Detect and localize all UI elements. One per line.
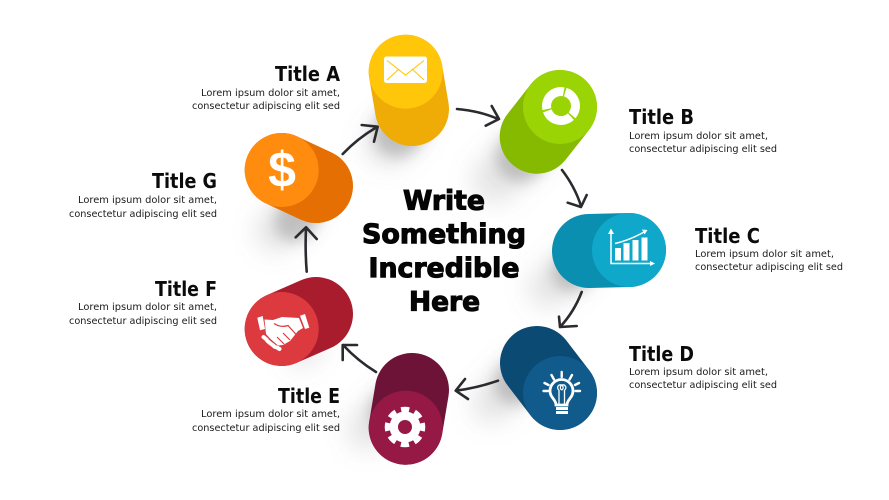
text block E bbox=[192, 384, 340, 434]
text block B: Title B bbox=[629, 105, 694, 129]
center heading: Something bbox=[362, 219, 526, 250]
cylinder F bbox=[245, 292, 319, 366]
center heading: Write bbox=[403, 186, 485, 216]
icon: gear bbox=[385, 407, 425, 447]
text block D bbox=[629, 342, 777, 391]
text block C: Lorem ipsum dolor sit amet, bbox=[695, 249, 834, 260]
arrow B to C bbox=[562, 170, 587, 207]
arrow D to E bbox=[456, 379, 498, 399]
center heading: Here bbox=[409, 286, 480, 318]
text block E: Lorem ipsum dolor sit amet, bbox=[201, 409, 340, 420]
text block D: Lorem ipsum dolor sit amet, bbox=[629, 367, 768, 378]
text block G: Lorem ipsum dolor sit amet, bbox=[78, 195, 217, 206]
text block E: consectetur adipiscing elit sed bbox=[192, 423, 340, 434]
text block C: consectetur adipiscing elit sed bbox=[695, 262, 843, 273]
text block C bbox=[695, 224, 843, 273]
icon: envelope bbox=[384, 56, 427, 83]
icon: light bulb bbox=[544, 372, 580, 414]
center heading: Incredible bbox=[368, 253, 520, 284]
text block E: Title E bbox=[278, 384, 340, 408]
soft shadows bbox=[275, 125, 575, 430]
arrow G to A bbox=[343, 125, 378, 154]
text block G bbox=[69, 169, 217, 220]
text block G: Title G bbox=[152, 169, 217, 193]
text block F: Lorem ipsum dolor sit amet, bbox=[78, 302, 217, 313]
cylinder A bbox=[369, 35, 443, 109]
text block F bbox=[69, 277, 217, 327]
arrow E to F bbox=[343, 345, 376, 372]
arrow C to D bbox=[559, 292, 582, 327]
text block G: consectetur adipiscing elit sed bbox=[69, 209, 217, 220]
text block D: consectetur adipiscing elit sed bbox=[629, 380, 777, 391]
text block A: Title A bbox=[275, 62, 340, 86]
cylinder E bbox=[369, 390, 443, 465]
text block B: Lorem ipsum dolor sit amet, bbox=[629, 131, 768, 142]
center heading bbox=[362, 186, 526, 318]
text block F: Title F bbox=[155, 277, 217, 301]
icon: bar chart bbox=[608, 228, 655, 266]
icon: recycle ring bbox=[543, 88, 579, 124]
text block A: Lorem ipsum dolor sit amet, bbox=[201, 88, 340, 99]
text block F: consectetur adipiscing elit sed bbox=[69, 316, 217, 327]
icon: dollar sign: $ bbox=[268, 142, 296, 198]
text block B: consectetur adipiscing elit sed bbox=[629, 144, 777, 155]
arrow F to G bbox=[296, 227, 317, 272]
text block D: Title D bbox=[629, 342, 694, 366]
cylinder C bbox=[589, 213, 666, 287]
icon: handshake bbox=[257, 314, 309, 349]
text block A: consectetur adipiscing elit sed bbox=[192, 101, 340, 112]
text block B bbox=[629, 105, 777, 155]
text block A bbox=[192, 62, 340, 112]
cylinder B bbox=[523, 70, 597, 144]
text block C: Title C bbox=[695, 224, 760, 248]
cylinder G bbox=[245, 133, 319, 207]
contact shadows bbox=[295, 125, 580, 411]
arrow A to B bbox=[457, 106, 499, 126]
cylinder D bbox=[523, 356, 597, 430]
